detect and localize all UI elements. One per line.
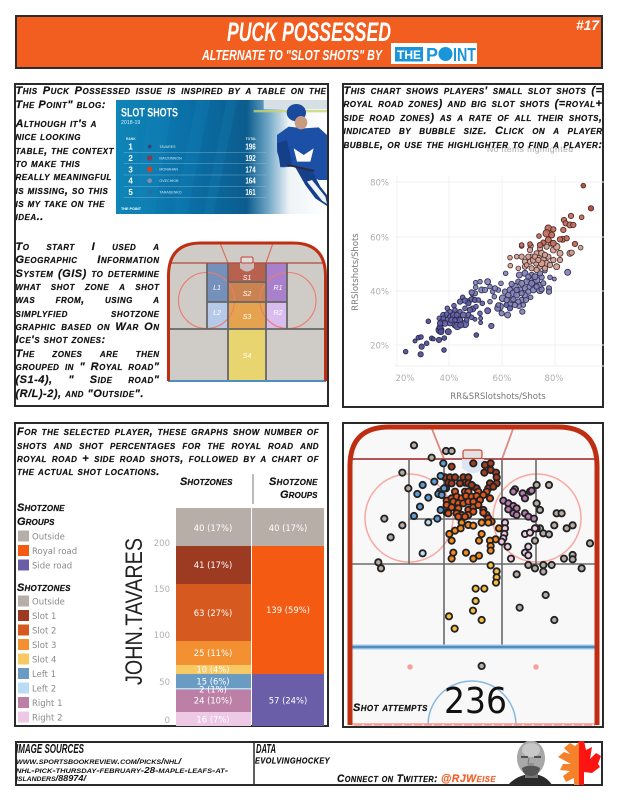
text: source url: www.sportsbookreview.com/picks/nhl/ — [16, 757, 182, 766]
y axis title: RRSlotshots/Shots — [351, 233, 361, 311]
text: bar chart description: For the selected player, these graphs show number of — [17, 426, 319, 438]
diagram: simplified shot zones rink: S3 — [243, 314, 251, 321]
text: zone method: Geographic Information — [16, 254, 160, 266]
text: zone method: grouped in " Royal road" — [16, 361, 160, 373]
text: chart description — [344, 85, 602, 151]
number: 236: 236 — [444, 681, 507, 722]
legend: shotzones — [17, 582, 71, 724]
text: source url: nhl-pick-thursday-february-28-maple-leafs-at- — [16, 766, 228, 775]
text: twitter handle: @RJWeise — [441, 773, 496, 785]
legend: shotzones: Right 1 — [32, 699, 62, 709]
text: bar chart description — [17, 426, 319, 478]
legend: shotzones: Slot 4 — [32, 656, 56, 666]
x axis tick labels: 20% — [396, 374, 414, 384]
text: zone method — [16, 241, 160, 400]
zone S1 — [228, 263, 266, 282]
image: Slot Shots table: SLOT SHOTS — [121, 106, 178, 120]
text: critique of table: idea.. — [16, 211, 44, 223]
x axis tick labels: 80% — [545, 374, 563, 384]
text: zone method: what shot zone a shot — [16, 281, 160, 293]
image: Slot Shots table: 3 — [128, 165, 133, 174]
zone L1 — [207, 263, 228, 302]
logo: The Point: THE — [397, 48, 421, 62]
image: Slot Shots table — [116, 100, 327, 214]
footer — [15, 741, 603, 786]
logo: The Point: INT — [453, 45, 476, 65]
legend: shotzones: Slot 3 — [32, 641, 56, 651]
bubbles: low rates — [403, 319, 479, 357]
image: Slot Shots table: THE POINT — [121, 206, 142, 211]
x axis tick labels: 60% — [493, 374, 511, 384]
text: zone method: Ice's shot zones: — [16, 334, 106, 346]
legend: shotzones: Slot 2 — [32, 626, 56, 636]
bubbles: upper rates — [508, 240, 583, 273]
shots: right zones — [498, 486, 538, 562]
legend: shotzone groups: Shotzone — [17, 502, 65, 514]
heading: image sources: IMAGE SOURCES — [16, 741, 84, 756]
text: zone method: To start I used a — [16, 241, 160, 253]
text: critique of table — [15, 118, 114, 223]
y axis labels: 200 — [154, 539, 170, 549]
y axis labels: 100 — [154, 631, 170, 641]
column header: Shotzone Groups: Shotzone — [269, 476, 318, 488]
stacked bar: shotzones: 24 (10%) — [194, 696, 232, 706]
image: Slot Shots table: TAVARES — [159, 145, 176, 149]
shots: slot 4 — [446, 562, 500, 632]
panel: inspiration and shot zones — [14, 83, 329, 407]
image: Slot Shots table: TOTAL — [246, 137, 256, 141]
text: inspiration intro: The Point" blog: — [16, 99, 106, 111]
player name: JOHN.TAVARES — [121, 538, 148, 685]
shots: slot 1 — [442, 460, 500, 491]
y axis labels: 150 — [154, 585, 170, 595]
legend: shotzones: Left 2 — [32, 684, 56, 694]
column header: Shotzone Groups: Groups — [280, 489, 318, 501]
image: Slot Shots table: OVECHKIN — [159, 179, 179, 183]
text: zone method: simplyfied shotzone — [16, 308, 160, 320]
column header: Shotzone Groups — [269, 476, 318, 501]
text: source url — [16, 757, 228, 783]
diagram: simplified shot zones rink: S4 — [243, 353, 251, 360]
legend: shotzones: Slot 1 — [32, 612, 56, 622]
stacked bar: shotzones: 10 (4%) — [196, 664, 230, 674]
image: Slot Shots table: 1 — [128, 143, 133, 152]
text: zone method: was from, using a — [16, 294, 160, 306]
legend: shotzone groups — [17, 502, 77, 572]
stacked bar: shotzones: 15 (6%) — [196, 676, 230, 686]
shots: outside — [375, 442, 593, 669]
text: connect on twitter: Connect on Twitter: — [337, 773, 438, 785]
legend: shotzone groups: Royal road — [32, 547, 77, 557]
subtitle: ALTERNATE TO "SLOT SHOTS" BY — [201, 47, 383, 64]
text: critique of table: to make this — [16, 158, 80, 170]
text: inspiration intro: This Puck Possessed issue is inspired by a table on the — [16, 85, 326, 97]
text: critique of table: really meaningful — [16, 171, 112, 183]
stacked bar: shotzone groups: 139 (59%) — [266, 605, 310, 615]
text: data source: evolvinghockey — [255, 754, 330, 766]
text: critique of table: Although it's a — [16, 118, 97, 130]
stacked bar: shotzones — [176, 508, 251, 726]
image: Slot Shots table: RANK — [126, 137, 136, 141]
stacked bar: shotzones: 40 (17%) — [194, 523, 232, 533]
rink — [350, 427, 597, 725]
legend: shotzone groups: Groups — [17, 516, 55, 528]
stacked bar: shotzones: 16 (7%) — [196, 714, 230, 724]
stacked bar: shotzones: 2 (1%) — [199, 684, 227, 694]
logo: The Point: P — [426, 45, 438, 65]
zone R1 — [266, 263, 287, 302]
text: bar chart description: royal road + side road shots, followed by a chart of — [17, 453, 319, 465]
text: chart description: This chart shows players' small slot shots (= — [344, 85, 602, 97]
x axis tick labels — [396, 374, 563, 384]
diagram: simplified shot zones rink: L2 — [213, 310, 221, 317]
text: critique of table: is my take on the — [16, 198, 105, 210]
y axis labels: 50 — [159, 678, 170, 688]
text: zone method: (R/L)-2), and "Outside". — [16, 388, 144, 400]
text: critique of table: nice looking — [16, 131, 81, 143]
zone S4 — [228, 329, 266, 380]
stacked bar: shotzones: 41 (17%) — [194, 560, 232, 570]
image: Slot Shots table: 161 — [245, 188, 256, 197]
image: Slot Shots table: TARASENKO — [159, 191, 182, 195]
diagram: simplified shot zones rink: L1 — [213, 285, 221, 292]
legend: shotzones: Outside — [32, 598, 65, 608]
image: Slot Shots table: 164 — [245, 177, 256, 186]
legend: shotzone groups: Outside — [32, 532, 65, 542]
diagram: simplified shot zones rink: R1 — [274, 285, 283, 292]
y axis tick labels: 20% — [370, 342, 389, 352]
zone S2 — [228, 282, 266, 302]
legend: shotzones: Shotzones — [17, 582, 71, 594]
text: inspiration intro — [16, 85, 326, 111]
image: Slot Shots table: 5 — [128, 188, 133, 197]
text: bar chart description: the actual shot locations. — [17, 466, 160, 478]
diagram: simplified shot zones rink: R2 — [274, 310, 283, 317]
image: Slot Shots table: 174 — [245, 165, 256, 174]
x axis tick labels: 40% — [440, 374, 458, 384]
text: chart description: side road zones) as a rate of all their shots, — [344, 112, 602, 124]
image: Slot Shots table: 196 — [245, 143, 256, 152]
shots: slot 3 — [446, 519, 502, 562]
stacked bar: shotzones: 25 (11%) — [194, 648, 232, 658]
image: Slot Shots table: 2018-19 — [121, 120, 140, 126]
text: source url: islanders/88974/ — [16, 774, 87, 783]
image: Slot Shots table: 2 — [128, 154, 133, 163]
diagram: simplified shot zones rink: S2 — [243, 291, 251, 298]
text: chart description: bubble, or use the highlighter to find a player: — [344, 139, 602, 151]
zone S3 — [228, 302, 266, 329]
legend: shotzone groups: Side road — [32, 562, 72, 572]
image: Slot Shots table: 4 — [128, 177, 133, 186]
y axis tick labels: 40% — [370, 288, 389, 298]
footer divider — [253, 741, 255, 786]
panel: scatter chart — [342, 83, 604, 408]
column divider — [252, 474, 254, 504]
title: PUCK POSSESSED — [227, 17, 391, 47]
text: zone method: The zones are then — [16, 348, 160, 360]
y axis tick labels: 60% — [370, 234, 389, 244]
text: bar chart description: shots and shot percentages for the royal road and — [17, 440, 319, 452]
note: no items highlighted: No items highlighted — [487, 144, 573, 154]
diagram: simplified shot zones rink: S1 — [243, 275, 251, 282]
shots: left zones — [411, 460, 447, 556]
image: Slot Shots table: MACKINNON — [159, 156, 182, 160]
y axis labels — [154, 539, 170, 726]
label: shot attempts: Shot attempts — [353, 702, 428, 714]
text: chart description: royal road zones) and big slot shots (=royal+ — [344, 98, 602, 110]
bubbles: lower-mid rates — [437, 290, 513, 330]
bubbles: highest rates — [519, 183, 594, 248]
issue number: #17 — [576, 17, 600, 33]
legend: shotzones: Left 1 — [32, 670, 56, 680]
header banner — [15, 15, 603, 69]
image: Slot Shots table: MONAHAN — [159, 168, 178, 172]
heading: data: DATA — [256, 741, 276, 756]
scatter chart — [351, 176, 604, 402]
y axis tick labels — [370, 178, 389, 352]
text: chart description: indicated by bubble size. Click on a player — [344, 125, 602, 137]
zone L2 — [207, 302, 228, 329]
diagram: simplified shot zones rink — [168, 243, 326, 381]
stacked bar: shotzone groups: 57 (24%) — [269, 696, 307, 706]
logo: The Point — [391, 43, 477, 65]
text: critique of table: table, the context — [16, 145, 114, 157]
icon: lion and maple leaf — [558, 741, 601, 785]
text: zone method: graphic based on War On — [16, 321, 160, 333]
text: critique of table: is missing, so this — [16, 185, 108, 197]
x axis title: RR&SRSlotshots/Shots — [450, 392, 546, 402]
stacked bar: shotzone groups: 40 (17%) — [269, 523, 307, 533]
panel: shot location map — [342, 422, 604, 728]
icon: author portrait — [508, 740, 552, 785]
bubbles: mid rates — [469, 268, 571, 318]
y axis labels: 0 — [165, 716, 170, 726]
panel: selected player bar charts — [14, 422, 329, 727]
y axis tick labels: 80% — [370, 178, 389, 188]
zone R2 — [266, 302, 287, 329]
image: Slot Shots table: 192 — [245, 154, 256, 163]
stacked bar: shotzones: 63 (27%) — [194, 608, 232, 618]
text: zone method: System (GIS) to determine — [16, 268, 160, 280]
legend: shotzones: Right 2 — [32, 714, 62, 724]
shots: slot 2 — [443, 488, 495, 525]
text: zone method: (S1-4), " Side road" — [16, 374, 160, 386]
stacked bar: shotzone groups — [252, 508, 324, 726]
column header: Shotzones: Shotzones — [180, 476, 233, 488]
